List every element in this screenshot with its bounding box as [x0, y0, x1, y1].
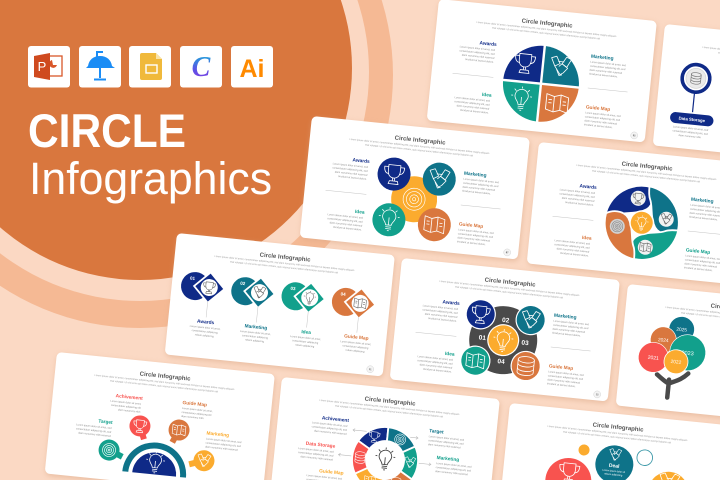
label block: Achivement: diam nonummy nibh euismod [314, 430, 347, 436]
heading: CIRCLE: CIRCLE [28, 104, 186, 157]
panel: pie quadrant slide: erat volutpat. Ut wisi enim ad minim veniam, quis nostrud exerci tation ullamcorper suscipit lobortis nisl [492, 27, 601, 41]
label block: Marketing: tincidunt ut laoreet dolore. [552, 332, 581, 337]
icon: Illustrator [231, 46, 273, 88]
panel: bubbles slide: Circle Infographic [592, 422, 644, 434]
label block: Guide Map: consectetuer adipiscing elit, sed [685, 258, 720, 265]
label block: Marketing: Lorem ipsum dolor sit amet, sed [590, 61, 627, 67]
label block: Idea: diam nonummy nibh euismod [329, 221, 363, 228]
label block: Idea [326, 206, 365, 232]
label block: Marketing: Lorem ipsum dolor sit amet, sed [206, 438, 242, 444]
label block: Guide Map: Lorem ipsum dolor sit amet, [182, 407, 213, 413]
panel: pie quadrant slide [426, 0, 658, 145]
label block: Idea [416, 348, 455, 374]
label block: Idea: Lorem ipsum dolor sit amet, sed [417, 355, 454, 362]
label block: Idea: Idea [355, 209, 365, 216]
label block: Marketing [689, 197, 720, 222]
step 03: Idea: Idea [301, 329, 312, 336]
label block: Marketing: Marketing [554, 313, 577, 321]
label block: Idea: tincidunt ut laoreet dolore. [460, 109, 489, 115]
icon: Google Slides [129, 46, 171, 88]
label block: Guide Map: Guide Map [458, 221, 484, 230]
label block: Guide Map: Guide Map [685, 247, 711, 256]
panel: numbered diamonds slide [164, 233, 396, 379]
label block: Awards: diam nonummy nibh euismod [562, 197, 595, 203]
body text [672, 125, 709, 140]
label block: Guide Map: Guide Map [319, 468, 344, 477]
label block: Marketing: consectetuer adipiscing elit, sed [463, 182, 499, 188]
panel: gear numbered slide: erat volutpat. Ut wisi enim ad minim veniam, quis nostrud exerci tation ullamcorper suscipit lobortis nisl [455, 286, 564, 300]
panel: semicircle pins slide [44, 352, 276, 480]
bubble: red trophy [543, 456, 594, 480]
label block: Guide Map: tincidunt ut laoreet dolore. [457, 240, 486, 246]
label block: Guide Map: tincidunt ut laoreet dolore. [584, 123, 613, 129]
panel: hub and four circles slide [299, 116, 531, 262]
bubble: small yellow dot [578, 444, 590, 456]
icon: Keynote [79, 46, 121, 88]
label block: Guide Map: consectetuer adipiscing elit, sed [548, 374, 584, 381]
arrows: gray connectors [338, 427, 434, 466]
label block: Idea: consectetuer adipiscing elit, sed [327, 217, 363, 224]
diagram: dark disc with numbered circles: 03 [521, 340, 529, 347]
label block: Data Storage: Data Storage [305, 441, 336, 450]
step 03: Idea: Lorem ipsum dolor sit amet, [290, 335, 321, 341]
panel: numbered diamonds slide: Circle Infographic [259, 252, 311, 264]
step 04: Guide Map: 04 [340, 291, 346, 297]
label block: Awards: Lorem ipsum dolor sit amet, sed [423, 304, 459, 311]
page number: 92 [633, 134, 636, 138]
panel: pinwheel slide: Lorem ipsum dolor sit amet, consectetuer adipiscing elit, sed diam nonummy nibh euismod tincidunt ut laoreet dolore magna aliquam [576, 164, 716, 181]
panel: pinwheel slide [526, 142, 720, 288]
label block: Achivement: Lorem ipsum dolor sit amet, sed [312, 421, 348, 428]
label block: Guide Map: Lorem ipsum dolor sit amet, sed [585, 111, 621, 118]
diagram: dark disc with numbered circles [459, 298, 547, 383]
label block: Marketing [462, 171, 500, 196]
step 03: Idea: rebum adipiscing [295, 344, 315, 348]
page number: 87 [506, 251, 509, 255]
pin: data storage ring [679, 63, 711, 114]
label block: Achivement [311, 414, 350, 436]
label block: Guide Map: consectetuer adipiscing elit [181, 411, 212, 417]
label block: Idea: Idea [582, 235, 592, 242]
label block: Marketing: diam nonummy nibh euismod [462, 186, 496, 192]
panel: pie quadrant slide: Lorem ipsum dolor sit amet, consectetuer adipiscing elit, sed diam nonummy nibh euismod tincidunt ut laoreet dolore magna aliquam [476, 21, 616, 38]
step 03: Idea: 03 [290, 286, 296, 291]
step 02: Marketing: consectetuer adipiscing [242, 334, 269, 340]
label block: Idea: Idea [482, 92, 492, 99]
label block: Awards: tincidunt ut laoreet dolore. [565, 201, 594, 207]
chart: year tree: 2023 [681, 350, 694, 357]
panel: numbered diamonds slide: Lorem ipsum dolor sit amet, consectetuer adipiscing elit, sed diam nonummy nibh euismod tincidunt ut laoreet dolore magna aliquam [214, 255, 354, 272]
page number: 11 [369, 368, 372, 371]
body text: diam nonummy nibh [678, 134, 702, 139]
label block: Marketing: consectetuer adipiscing elit, sed [435, 466, 472, 473]
panel: six segment wheel slide: Circle Infographic [364, 396, 416, 408]
label block: Marketing: Marketing [436, 455, 460, 463]
label block: Idea: Lorem ipsum dolor sit amet, sed [554, 239, 591, 246]
label block: Awards: tincidunt ut laoreet dolore. [428, 317, 457, 323]
label block: Guide Map [547, 363, 585, 389]
step 01: Awards: 01 [190, 276, 196, 281]
panel: hub and four circles slide: Lorem ipsum dolor sit amet, consectetuer adipiscing elit, sed diam nonummy nibh euismod tincidunt ut laoreet dolore magna aliquam [349, 138, 489, 155]
panel: hub and four circles slide: erat volutpat. Ut wisi enim ad minim veniam, quis nostrud exerci tation ullamcorper suscipit lobortis nisl [365, 144, 474, 158]
panel: six segment wheel slide [269, 377, 501, 480]
label block: Awards: consectetuer adipiscing elit, sed [332, 166, 368, 173]
label block: Idea: Idea [445, 351, 455, 358]
label block: Idea: Lorem ipsum dolor sit amet, sed [454, 96, 491, 103]
label block: Achivement: Lorem ipsum dolor sit amet, [110, 400, 142, 406]
bubble: yellow [646, 470, 690, 480]
panel: bubbles slide: Lorem ipsum dolor sit amet, consectetuer adipiscing elit, sed diam nonummy nibh euismod tincidunt ut laoreet dolore magna aliquam [547, 425, 687, 442]
step 03: Idea: consectetuer adipiscing [292, 339, 319, 345]
label block: Guide Map: consectetuer adipiscing elit, sed [458, 232, 494, 239]
label block: Idea: tincidunt ut laoreet dolore. [423, 368, 452, 374]
icon: PowerPoint [28, 46, 70, 88]
label block: Awards: Awards [442, 299, 460, 307]
panel: gear numbered slide [389, 258, 621, 404]
label block: Idea: diam nonummy nibh euismod [556, 247, 590, 254]
step 02: Marketing: Lorem ipsum dolor sit amet, [240, 330, 271, 336]
label block: Target: Target [429, 428, 444, 436]
chart: year tree [634, 313, 709, 401]
pill label: Data Storage: Data Storage [678, 116, 706, 123]
label block: Idea: tincidunt ut laoreet dolore. [333, 226, 362, 232]
panel: data storage slide [652, 24, 720, 170]
label block: Idea: consectetuer adipiscing elit, sed [454, 100, 490, 107]
page number: 12 [596, 393, 599, 397]
step 01: Awards [176, 268, 227, 339]
diagram: pinwheel [601, 182, 682, 263]
label block: Guide Map: Guide Map [548, 363, 574, 372]
label block: Marketing [205, 431, 243, 452]
label block: Idea: tincidunt ut laoreet dolore. [560, 252, 589, 258]
label block: Awards: consectetuer adipiscing elit, sed [422, 308, 458, 315]
label block: Guide Map: Guide Map [585, 104, 611, 113]
label block: Marketing [435, 455, 473, 477]
label block: Marketing: Marketing [591, 54, 614, 62]
diagram: dark disc with numbered circles: 02 [502, 317, 510, 325]
label block: Guide Map: diam nonummy nibh euismod [584, 119, 618, 126]
step 01: Awards: Awards [197, 318, 215, 326]
label block: Awards: Awards [352, 157, 370, 165]
panel: pinwheel slide: Circle Infographic [621, 161, 673, 173]
step 01: Awards: consectetuer adipiscing [192, 329, 218, 335]
label block: Target [428, 428, 466, 450]
label block: Awards [331, 155, 370, 181]
page number [630, 132, 638, 139]
chart: year tree: 2025 [676, 327, 688, 334]
bubble: empty ring [636, 449, 653, 466]
label block: Marketing [552, 313, 590, 338]
label block: Guide Map: consectetuer adipiscing elit, sed [585, 115, 621, 122]
label block: Guide Map: diam nonummy nibh euismod [684, 262, 718, 269]
label block: Marketing: Marketing [206, 431, 229, 439]
label block: Target: Lorem ipsum dolor sit amet, sed [76, 423, 112, 430]
step 02: Marketing: 02 [240, 281, 246, 286]
step 04: Guide Map: rebum adipiscing [345, 349, 365, 354]
label block: Achivement: Achivement [115, 393, 143, 402]
label block: Guide Map: tincidunt ut laoreet dolore. [547, 382, 576, 388]
panel: pie quadrant slide: Circle Infographic [521, 18, 573, 30]
panel: hub and four circles slide: Circle Infographic [394, 135, 446, 147]
label block: Marketing: Lorem ipsum dolor sit amet, sed [436, 462, 472, 469]
label block: Awards: tincidunt ut laoreet dolore. [465, 58, 494, 64]
chart: year tree: 2021 [647, 355, 659, 362]
label block: Target: consectetuer adipiscing elit, sed [76, 427, 112, 434]
icon: Canva: C [192, 52, 211, 83]
label block: Marketing: Lorem ipsum dolor sit amet, sed [463, 178, 500, 184]
step 01: Awards: Lorem ipsum dolor sit amet, [190, 325, 221, 331]
chart: six segment wheel [349, 424, 421, 480]
label block: Achivement: Achivement [322, 415, 350, 424]
step 03: Idea [277, 278, 328, 349]
label block: Achivement: diam nonummy nibh [118, 408, 141, 414]
label block: Awards: diam nonummy nibh euismod [462, 54, 495, 60]
page number [366, 365, 374, 373]
label block: Guide Map: Lorem ipsum dolor sit amet, sed [685, 254, 720, 261]
background circle dark orange [0, 0, 352, 280]
label block: Marketing: diam nonummy nibh euismod [205, 445, 238, 452]
label block: Marketing [589, 54, 627, 79]
label block: Marketing: tincidunt ut laoreet dolore. [462, 190, 491, 195]
label block: Awards: consectetuer adipiscing elit, sed [559, 192, 595, 199]
label block: Guide Map [181, 400, 214, 421]
step 04: Guide Map: Guide Map [344, 333, 369, 342]
icon row: app logos [28, 46, 273, 88]
panel: tree timeline slide [615, 284, 720, 430]
label block: Marketing: tincidunt ut laoreet dolore. [589, 73, 618, 78]
bubble: Deal: rebum adipiscing [604, 472, 623, 477]
panel: six segment wheel slide: Lorem ipsum dolor sit amet, consectetuer adipiscing elit, sed diam nonummy nibh euismod tincidunt ut laoreet dolore magna aliquam [319, 399, 459, 416]
panel: gear numbered slide: Circle Infographic [484, 277, 536, 289]
step 02: Marketing: Marketing [244, 323, 267, 332]
label block: Guide Map: diam nonummy nibh euismod [547, 378, 581, 385]
label block: Idea: diam nonummy nibh euismod [419, 363, 453, 370]
panel: bubbles slide [497, 403, 720, 480]
diagram: semicircle with four pins [97, 412, 218, 480]
label block: Guide Map: Lorem ipsum dolor sit amet, sed [458, 228, 494, 235]
label block: Awards: consectetuer adipiscing elit, sed [459, 49, 495, 56]
panel: numbered diamonds slide: erat volutpat. Ut wisi enim ad minim veniam, quis nostrud exerci tation ullamcorper suscipit lobortis nisl [230, 261, 339, 275]
label block: Awards [458, 38, 497, 64]
diagram: hub with four circles [371, 156, 457, 243]
label block: Guide Map [457, 221, 495, 247]
label block: Guide Map: Lorem ipsum dolor sit amet, sed [548, 370, 584, 377]
diagram: dark disc with numbered circles: 04 [497, 358, 505, 366]
label block: Target [75, 416, 113, 438]
heading: Infographics: Infographics [29, 153, 272, 204]
label block: Marketing: Marketing [464, 171, 487, 179]
label block: Target: diam nonummy nibh euismod [428, 443, 461, 449]
background circle outer ring [0, 0, 393, 328]
bubble: Deal: Lorem ipsum dolor sit [602, 469, 625, 474]
diagram: dark disc with numbered circles: 01 [478, 334, 487, 342]
label block: Awards: Awards [479, 40, 497, 48]
label block: Guide Map [306, 467, 344, 480]
label block: Awards: diam nonummy nibh euismod [425, 313, 458, 319]
label block: Awards: Lorem ipsum dolor sit amet, sed [460, 45, 496, 52]
background circle pale ring [0, 0, 369, 301]
panel: gear numbered slide: Lorem ipsum dolor sit amet, consectetuer adipiscing elit, sed diam nonummy nibh euismod tincidunt ut laoreet dolore magna aliquam [439, 280, 579, 297]
icon: Canva [180, 46, 222, 88]
label block: Data Storage [297, 440, 336, 462]
label block: Achivement: consectetuer adipiscing elit, sed [312, 425, 348, 432]
label block: Marketing: Lorem ipsum dolor sit amet, sed [553, 320, 590, 326]
panel: six segment wheel slide: erat volutpat. Ut wisi enim ad minim veniam, quis nostrud exerci tation ullamcorper suscipit lobortis nisl [335, 405, 444, 419]
label block: Awards: tincidunt ut laoreet dolore. [338, 175, 367, 181]
label block: Data Storage: Lorem ipsum dolor sit amet, sed [298, 447, 334, 454]
label block: Achivement: consectetuer adipiscing elit [111, 404, 141, 410]
panel: semicircle pins slide: Lorem ipsum dolor sit amet, consectetuer adipiscing elit, sed diam nonummy nibh euismod tincidunt ut laoreet dolore magna aliquam [94, 374, 234, 391]
label block: Achivement [109, 393, 143, 414]
label block: Idea: diam nonummy nibh euismod [456, 104, 490, 111]
label block: Target: Lorem ipsum dolor sit amet, sed [429, 435, 465, 442]
label block: Target: Target [98, 419, 113, 426]
label block: Data Storage: consectetuer adipiscing elit, sed [298, 451, 334, 458]
panel: semicircle pins slide: Circle Infographic [139, 371, 191, 383]
body text: consectetuer adipiscing elit, sed [672, 129, 709, 136]
label block: Awards [421, 297, 460, 323]
bubble: Deal: Deal [609, 463, 620, 470]
label block: Idea: consectetuer adipiscing elit, sed [554, 243, 590, 250]
icon: PowerPoint: P [38, 59, 46, 74]
body text: Lorem ipsum dolor sit amet, sed [673, 125, 709, 132]
label block: Guide Map: Guide Map [182, 400, 207, 408]
chart: year tree: 2022 [670, 359, 682, 366]
step 02: Marketing: rebum adipiscing [245, 338, 265, 343]
label block: Awards: Lorem ipsum dolor sit amet, sed [333, 162, 369, 169]
label block: Marketing: consectetuer adipiscing elit, sed [205, 441, 242, 448]
label block: Guide Map: tincidunt ut laoreet dolore. [684, 266, 713, 272]
label block: Guide Map: diam nonummy nibh [181, 415, 204, 420]
page number [593, 391, 601, 398]
step 02: Marketing [226, 273, 278, 344]
panel: semicircle pins slide: erat volutpat. Ut wisi enim ad minim veniam, quis nostrud exerci tation ullamcorper suscipit lobortis nisl [110, 380, 219, 394]
label block: Marketing: tincidunt ut laoreet dolore. [689, 216, 718, 221]
label block: Idea [453, 89, 492, 115]
icon: Illustrator: Ai [240, 55, 264, 83]
panel: bubbles slide: erat volutpat. Ut wisi enim ad minim veniam, quis nostrud exerci tation ullamcorper suscipit lobortis nisl [563, 431, 672, 445]
page number [503, 249, 511, 256]
chart: pie of four quadrants [499, 42, 583, 125]
label block: Data Storage: diam nonummy nibh euismod [300, 455, 334, 462]
label block: Target: consectetuer adipiscing elit, sed [428, 439, 464, 446]
step 04: Guide Map: Lorem ipsum dolor sit amet, [340, 340, 372, 346]
pill label: Data Storage [670, 112, 714, 127]
label block: Marketing: diam nonummy nibh euismod [589, 69, 623, 75]
step 04: Guide Map: consectetuer adipiscing [342, 344, 369, 350]
label block: Awards: Lorem ipsum dolor sit amet, sed [560, 188, 596, 195]
label block: Marketing: consectetuer adipiscing elit, sed [553, 324, 589, 330]
label block: Marketing: diam nonummy nibh euismod [435, 470, 468, 476]
label block: Idea [553, 232, 592, 258]
label block: Awards [558, 181, 597, 207]
panel: pinwheel slide: erat volutpat. Ut wisi enim ad minim veniam, quis nostrud exerci tation ullamcorper suscipit lobortis nisl [592, 170, 701, 184]
label block: Guide Map [584, 104, 622, 130]
label block: Idea: consectetuer adipiscing elit, sed [417, 359, 453, 366]
label block: Target: diam nonummy nibh euismod [78, 432, 112, 438]
label block: Guide Map [684, 247, 720, 273]
label block: Awards: diam nonummy nibh euismod [335, 171, 368, 177]
label block: Marketing: Marketing [691, 197, 714, 205]
label block: Idea: Lorem ipsum dolor sit amet, sed [327, 213, 364, 220]
label block: Awards: Awards [579, 183, 597, 191]
chart: year tree: 2024 [658, 337, 669, 344]
bubble: Deal [594, 444, 635, 480]
label block: Marketing: diam nonummy nibh euismod [552, 328, 586, 334]
step 04: Guide Map [327, 284, 378, 354]
step 01: Awards: rebum adipiscing [195, 333, 214, 338]
label block: Marketing: consectetuer adipiscing elit, sed [590, 65, 626, 71]
label block: Guide Map: diam nonummy nibh euismod [457, 236, 491, 243]
